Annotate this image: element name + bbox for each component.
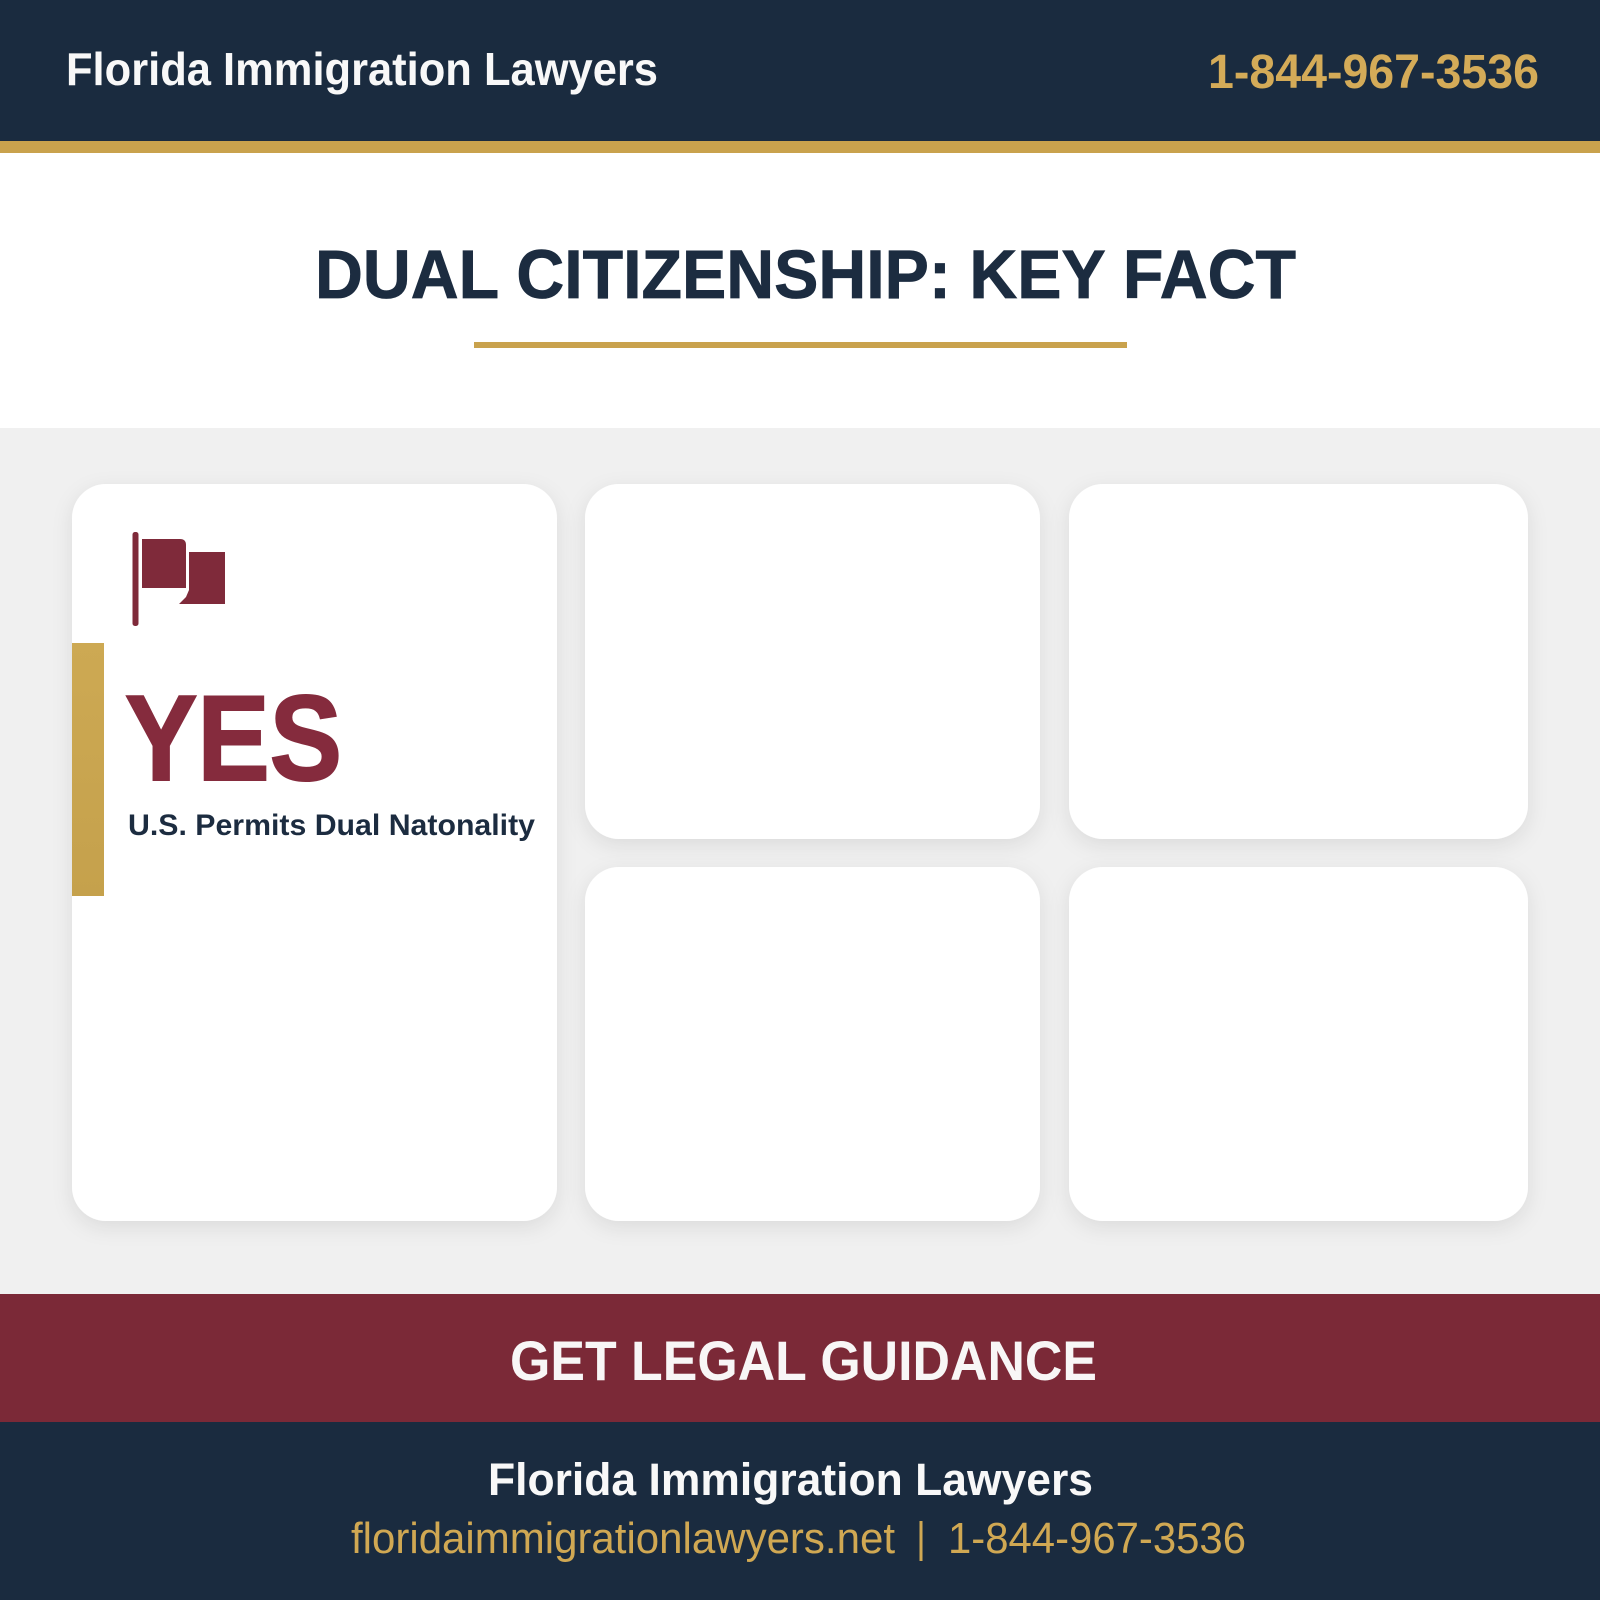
footer website: floridaimmigrationlawyers.net: [351, 1514, 895, 1563]
title underline: [474, 342, 1127, 348]
call to action text: GET LEGAL GUIDANCE: [510, 1329, 1097, 1392]
main content area: [0, 428, 1600, 1294]
header bar: [0, 0, 1600, 153]
panel: empty card bottom middle: [585, 867, 1040, 1221]
call to action band: [0, 1294, 1600, 1422]
footer firm name: Florida Immigration Lawyers: [488, 1454, 1093, 1505]
footer separator: [920, 1521, 922, 1561]
panel: empty card bottom right: [1069, 867, 1528, 1221]
header phone number: 1-844-967-3536: [1208, 46, 1539, 99]
footer: [0, 1422, 1600, 1600]
title section: [0, 153, 1600, 428]
panel: empty card top right: [1069, 484, 1528, 839]
subheading: U.S. Permits Dual Natonality: [128, 809, 535, 842]
icon: flag: [132, 532, 225, 626]
panel: tall left card: [72, 484, 557, 1221]
YES headline: YES: [125, 670, 342, 806]
title: DUAL CITIZENSHIP: KEY FACT: [315, 236, 1296, 313]
gold accent bar: [72, 643, 104, 896]
panel: empty card top middle: [585, 484, 1040, 839]
footer phone number: 1-844-967-3536: [948, 1514, 1246, 1563]
header firm name: Florida Immigration Lawyers: [66, 43, 658, 95]
